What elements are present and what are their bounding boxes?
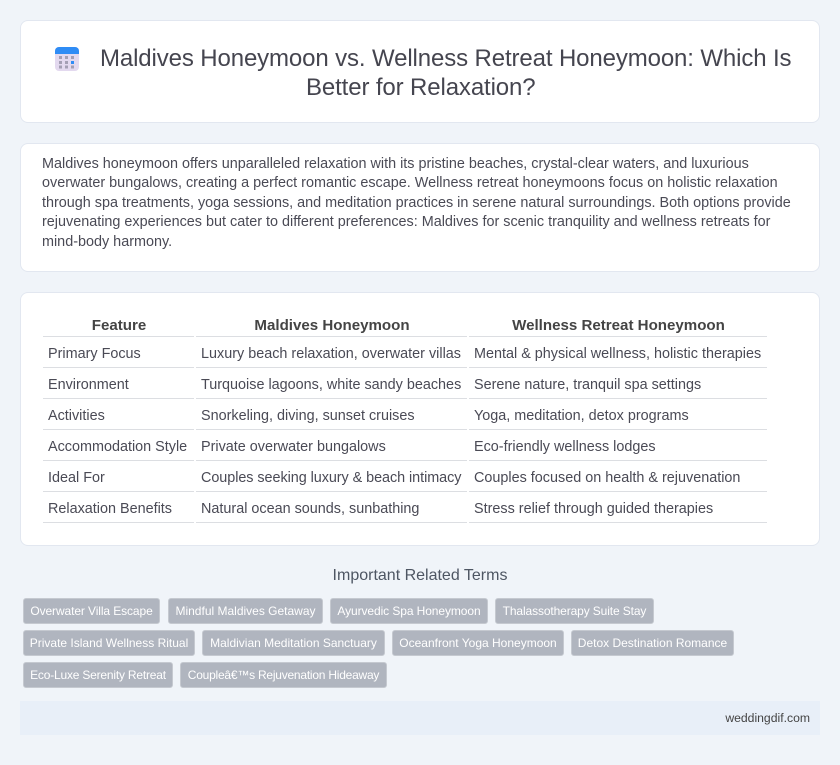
icon: calendar [55,47,79,71]
title [100,45,791,101]
intro paragraph: overwater bungalows, creating a perfect romantic escape. Wellness retreat honeymoons focus on holistic relaxation [42,175,778,191]
related term tags [23,598,734,688]
comparison table: Feature [92,317,146,334]
comparison table: Serene nature, tranquil spa settings [474,377,701,393]
related term tags: Overwater Villa Escape [30,604,153,618]
intro paragraph [42,156,791,250]
related term tags: Coupleâ€™s Rejuvenation Hideaway [188,668,379,682]
comparison table: Yoga, meditation, detox programs [474,408,689,424]
comparison table [43,317,767,523]
comparison table: Mental & physical wellness, holistic therapies [474,346,761,362]
footer bar [20,701,820,735]
intro paragraph: Maldives honeymoon offers unparalleled relaxation with its pristine beaches, crystal-clear waters, and luxurious [42,156,749,172]
related terms heading: Important Related Terms [333,567,507,584]
title: Maldives Honeymoon vs. Wellness Retreat Honeymoon: Which Is [100,45,791,72]
related term tags: Mindful Maldives Getaway [175,604,316,618]
related term tags: Eco-Luxe Serenity Retreat [30,668,166,682]
comparison table: Activities [48,408,105,424]
comparison table: Snorkeling, diving, sunset cruises [201,408,415,424]
related term tags: Maldivian Meditation Sanctuary [210,636,377,650]
related term tags: Oceanfront Yoga Honeymoon [399,636,557,650]
intro paragraph: through spa treatments, yoga sessions, and meditation practices in serene natural surroundings. Both options provide [42,195,791,211]
related term tags: Detox Destination Romance [578,636,727,650]
comparison table: Maldives Honeymoon [254,317,410,334]
footer source: weddingdif.com [725,711,810,725]
comparison table: Stress relief through guided therapies [474,501,713,517]
related term tags: Private Island Wellness Ritual [30,636,188,650]
comparison table: Accommodation Style [48,439,187,455]
comparison table: Eco-friendly wellness lodges [474,439,656,455]
header card [20,20,820,123]
comparison table: Primary Focus [48,346,141,362]
comparison table: Turquoise lagoons, white sandy beaches [201,377,461,393]
comparison table card [20,292,820,546]
comparison table: Environment [48,377,129,393]
intro paragraph: rejuvenating experiences but cater to different preferences: Maldives for scenic tranquility and wellness retreats for [42,214,770,230]
intro paragraph card [20,143,820,272]
comparison table: Ideal For [48,470,105,486]
comparison table: Wellness Retreat Honeymoon [512,317,725,334]
comparison table: Natural ocean sounds, sunbathing [201,501,419,517]
intro paragraph: mind-body harmony. [42,234,172,250]
comparison table: Couples seeking luxury & beach intimacy [201,470,461,486]
comparison table: Couples focused on health & rejuvenation [474,470,740,486]
comparison table: Private overwater bungalows [201,439,386,455]
comparison table: Relaxation Benefits [48,501,172,517]
title: Better for Relaxation? [306,74,536,101]
related term tags: Ayurvedic Spa Honeymoon [337,604,481,618]
related term tags: Thalassotherapy Suite Stay [503,604,646,618]
comparison table: Luxury beach relaxation, overwater villas [201,346,461,362]
